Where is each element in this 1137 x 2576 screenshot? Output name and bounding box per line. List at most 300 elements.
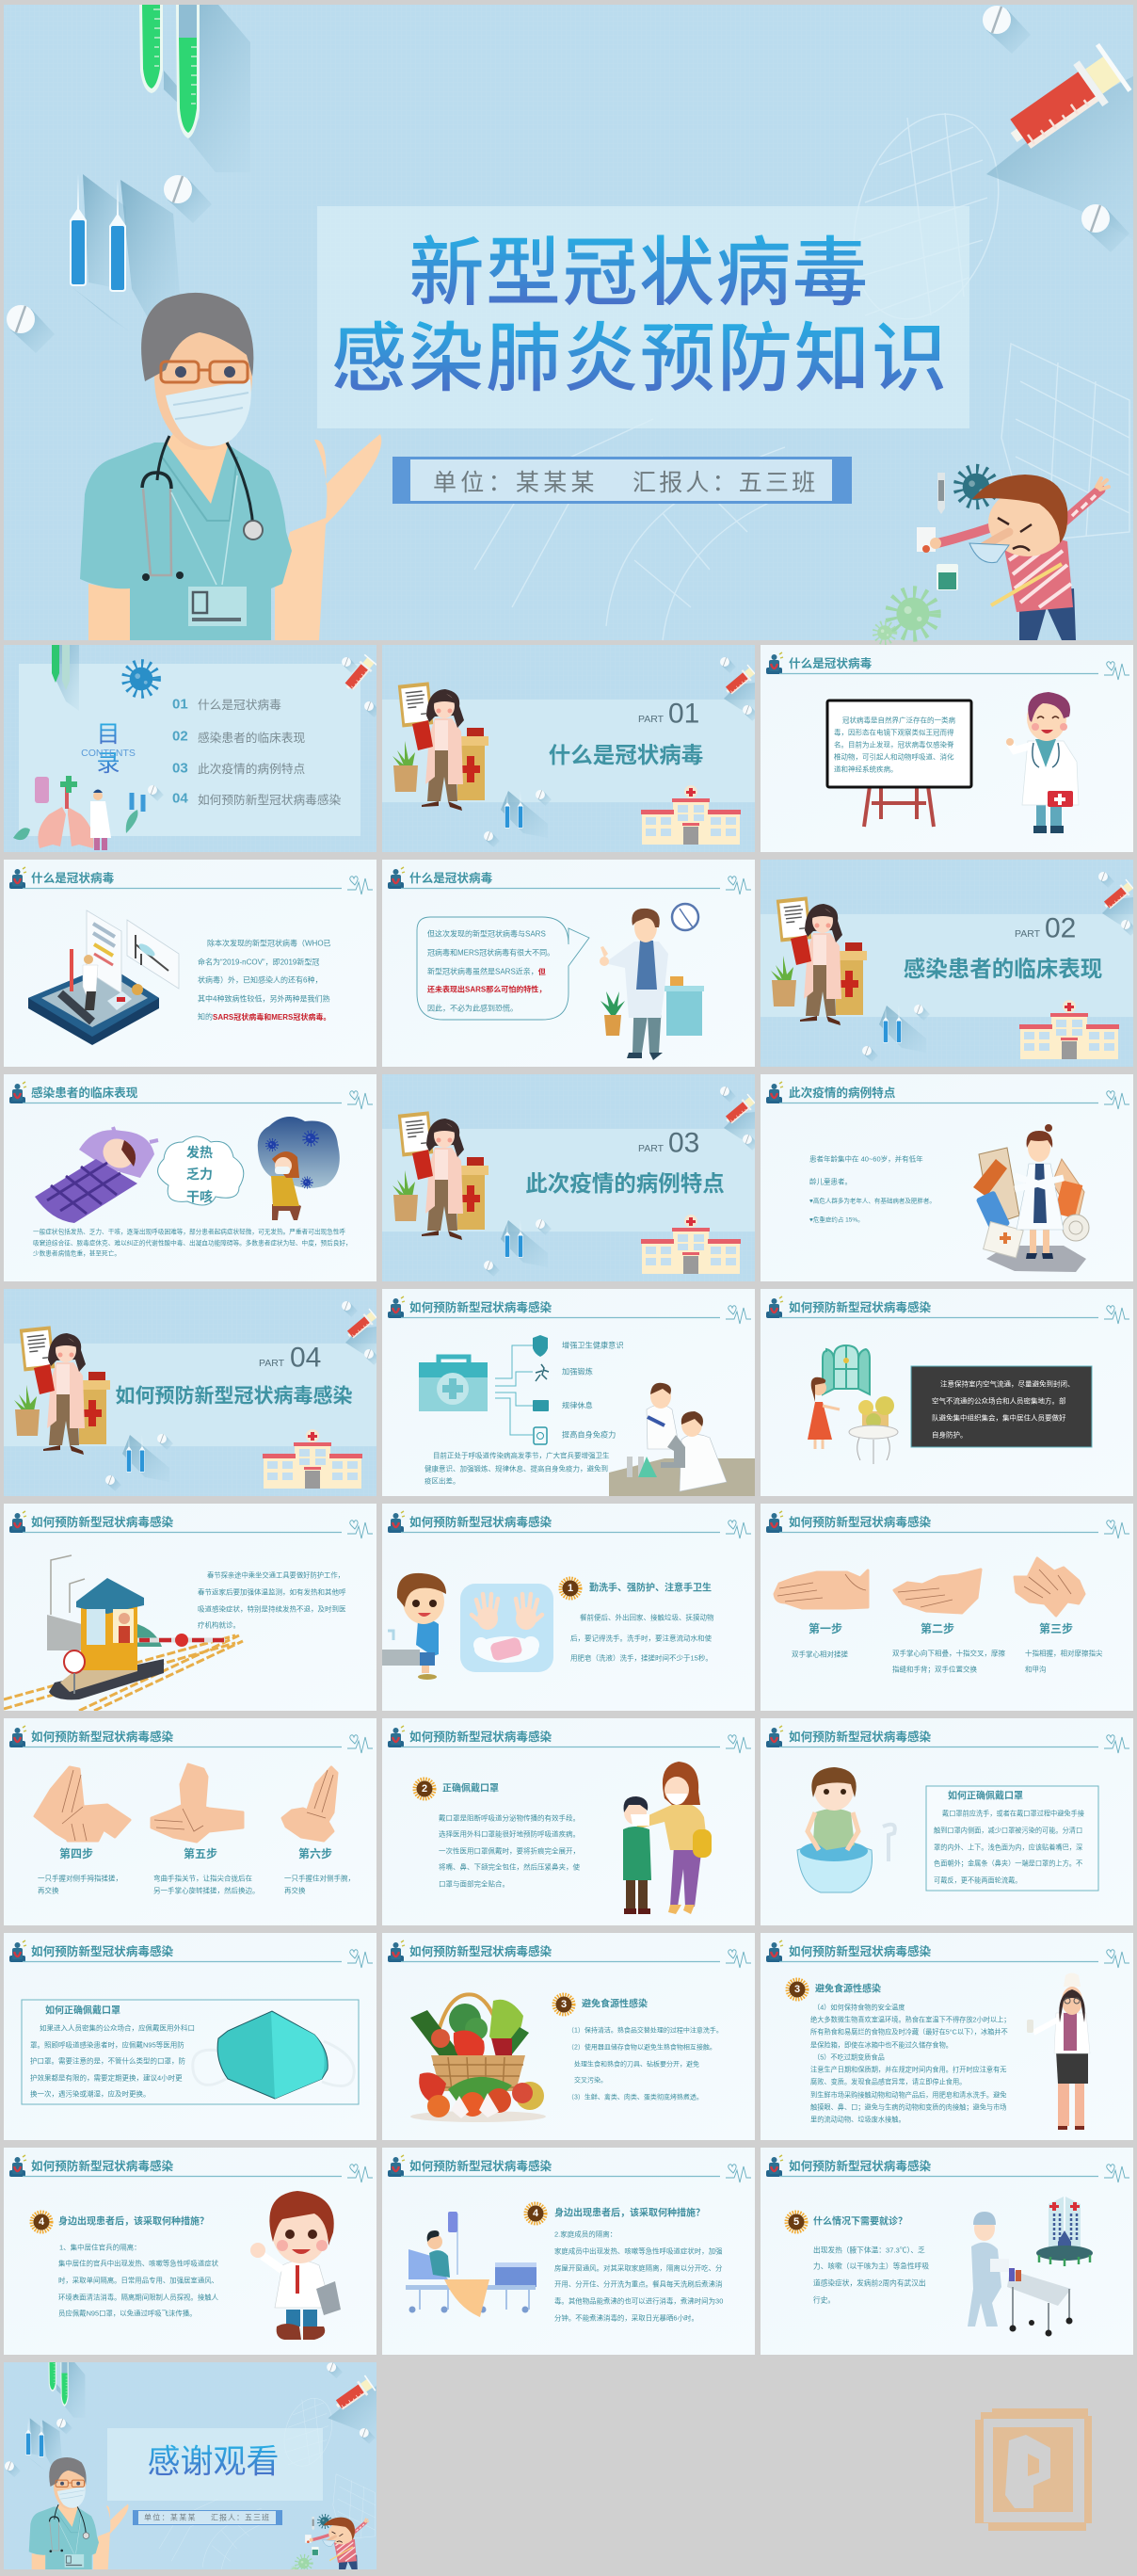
paragraph: 1、集中居住官兵的隔离： — [59, 2243, 141, 2252]
slide: if someone is sick 1 — [4, 2148, 376, 2355]
board with text: 冠状病毒是自然界广泛存在的一类病 — [842, 716, 955, 725]
mask tips box: 戴口罩前应洗手，或者在戴口罩过程中避免手接 — [942, 1810, 1084, 1817]
desk — [665, 976, 704, 1036]
paragraph: 春节返家后要加强体温监测，如有发热和其他呼 — [198, 1587, 346, 1597]
icon: clock — [672, 904, 698, 930]
text block: 患者年龄集中在 40~60岁，并有低年 — [809, 1154, 923, 1164]
step 2: 指缝和手背；双手位置交换 — [892, 1665, 977, 1674]
step 4: 第四步 — [59, 1846, 93, 1860]
heading: 什么是冠状病毒 — [789, 656, 873, 670]
section art — [4, 1289, 380, 1496]
part number: PART — [638, 1143, 665, 1154]
slide background — [4, 1933, 376, 2140]
badge 1: 1 — [568, 1583, 573, 1594]
section title: 如何预防新型冠状病毒感染 — [115, 1384, 352, 1407]
badge 3: 3 — [794, 1984, 800, 1995]
heading: 如何预防新型冠状病毒感染 — [31, 2159, 174, 2173]
heading: 如何预防新型冠状病毒感染 — [409, 1300, 552, 1314]
step 6: 第六步 — [298, 1846, 332, 1860]
section title: 感染患者的临床表现 — [904, 956, 1102, 981]
contents list: 03 — [172, 761, 188, 776]
step 1: 双手掌心相对揉搓 — [792, 1650, 848, 1659]
mask tips box: 换一次，遇污染或潮湿，应及时更换。 — [30, 2088, 151, 2098]
branch labels: 加强锻炼 — [562, 1367, 593, 1377]
paragraph: 力、咳嗽（以干咳为主）等急性呼吸 — [813, 2262, 929, 2271]
illustration: cartoon doctor — [250, 2191, 341, 2340]
paragraph: 一般症状包括发热、乏力、干咳，逐渐出现呼吸困难等，部分患者起病症状轻微，可无发热。严重者可出现急性呼 — [33, 1228, 345, 1235]
contents list: 感染患者的临床表现 — [198, 731, 305, 745]
step 5: 第五步 — [184, 1846, 217, 1860]
part number: 03 — [668, 1128, 699, 1158]
slide background — [382, 1289, 755, 1496]
step 5: 另一手掌心旋转揉搓，然后换边。 — [153, 1885, 260, 1894]
paragraph: 时，采取单间隔离。日常用品专用、加强居室通风、 — [58, 2277, 218, 2284]
speech bubble with text: 因此，不必为此感到恐慌。 — [427, 1004, 518, 1013]
badge 4: 4 — [39, 2216, 45, 2228]
contents list: 04 — [172, 791, 188, 806]
paragraph: 除本次发现的新型冠状病毒（WHO已 — [207, 938, 331, 947]
step 2: 双手掌心向下相叠，十指交叉，摩擦 — [892, 1648, 1005, 1657]
icon: runner — [536, 1364, 549, 1381]
paragraph — [198, 1570, 346, 1629]
step 6: 一只手握住对侧手腕， — [284, 1874, 355, 1883]
header strip — [9, 1082, 373, 1109]
illustration: window — [823, 1345, 870, 1394]
paragraph: 知的SARS冠状病毒和MERS冠状病毒。 — [198, 1011, 330, 1021]
title panel — [317, 206, 969, 428]
paragraph — [33, 1228, 352, 1258]
thought cloud with symptoms — [158, 1136, 244, 1205]
paragraph: 疗机构就诊。 — [198, 1619, 240, 1629]
header strip — [766, 1726, 1129, 1753]
heading: 如何预防新型冠状病毒感染 — [789, 1300, 932, 1314]
mask tips box: 护效果都是有限的，需要定期更换，建议4小时更 — [30, 2073, 183, 2083]
slide: wearing a mask 3 — [4, 1933, 376, 2140]
section art — [382, 1074, 759, 1281]
speech bubble with text — [417, 917, 589, 1020]
paragraph — [810, 2004, 1010, 2124]
section art — [382, 645, 759, 852]
slide background — [761, 1074, 1133, 1281]
list: （3）生鲜、禽类、肉类、蛋类彻底烤熟煮透。 — [568, 2092, 703, 2101]
badge heading: 什么情况下需要就诊？ — [813, 2214, 907, 2228]
contents list: 什么是冠状病毒 — [198, 699, 281, 712]
paragraph: 腐败、变质。发现食品感官异常，请立即停止食用。 — [810, 2077, 966, 2086]
slide: part 04 — [4, 1289, 380, 1496]
paragraph: 一次性医用口罩佩戴时，要将折痕完全展开， — [439, 1845, 580, 1855]
illustration: doctor with supplies — [973, 1124, 1089, 1272]
slide background — [382, 1933, 755, 2140]
reporter bar: 单位：某某某 — [144, 2512, 197, 2521]
dark text panel — [911, 1366, 1092, 1447]
paragraph: 其中4种致病性较低，另外两种是我们熟 — [198, 994, 329, 1004]
speech bubble with text: 还未表现出SARS那么可怕的特性， — [427, 985, 546, 994]
mask tips box: 如何正确佩戴口罩 — [45, 2004, 120, 2017]
header strip — [9, 2155, 373, 2182]
branch labels: 提高自身免疫力 — [562, 1429, 616, 1439]
paragraph: 戴口罩是阻断呼吸道分泌物传播的有效手段。 — [439, 1813, 580, 1823]
dark text panel: 队避免集中组织集会，集中居住人员要做好 — [932, 1412, 1066, 1422]
slide: prevention overview — [382, 1289, 755, 1496]
branch labels: 增强卫生健康意识 — [562, 1341, 624, 1350]
header strip — [9, 1940, 373, 1968]
part number — [1015, 917, 1075, 938]
slide: contents — [4, 645, 380, 852]
badge heading: 勤洗手、强防护、注意手卫生 — [589, 1582, 712, 1593]
board with text — [827, 700, 971, 787]
illustration: isometric phone — [28, 910, 179, 1045]
mask tips box: 如果进入人员密集的公众场合，应佩戴医用外科口 — [40, 2022, 195, 2032]
section title: 什么是冠状病毒 — [549, 743, 703, 767]
text block: ♥高危人群多为老年人、有基础病者及肥胖者。 — [809, 1196, 936, 1205]
badge heading: 正确佩戴口罩 — [442, 1781, 499, 1795]
dark text panel: 自身防护。 — [932, 1429, 968, 1439]
mask tips box: 触到口罩内侧面，减少口罩被污染的可能。分清口 — [934, 1827, 1082, 1834]
paragraph: 集中居住的官兵中出现发热、咳嗽等急性呼吸道症状 — [58, 2260, 219, 2267]
header strip — [9, 1511, 373, 1538]
heading: 如何预防新型冠状病毒感染 — [31, 1730, 174, 1744]
slide background — [761, 1504, 1133, 1711]
illustration: doctor with kit — [1006, 692, 1079, 833]
paragraph — [570, 1612, 714, 1663]
list — [568, 2026, 723, 2101]
step 5 — [152, 1764, 260, 1894]
thanks title: 感谢观看 — [147, 2444, 280, 2480]
slide background — [382, 860, 755, 1067]
slide background — [4, 860, 376, 1067]
paragraph: 道感染症状，发病前2周内有武汉出 — [813, 2278, 926, 2288]
text block: ♥危重症约占 15%。 — [809, 1215, 864, 1224]
mask tips box: 护口罩。需要注意的是，不管什么类型的口罩，防 — [30, 2056, 185, 2066]
heading: 如何预防新型冠状病毒感染 — [409, 2159, 552, 2173]
hands 3 — [1015, 1558, 1084, 1616]
illustration: hospital building — [1036, 2197, 1093, 2266]
slide background — [4, 1504, 376, 1711]
part number — [259, 1343, 321, 1373]
paragraph: 员应佩戴N95口罩，以免通过呼吸飞沫传播。 — [58, 2309, 197, 2318]
slide: wearing a mask 2 — [761, 1718, 1133, 1925]
illustration: hospital bed — [406, 2212, 536, 2317]
slide: what is coronavirus 2 — [4, 860, 376, 1067]
paragraph: 口罩与面部完全贴合。 — [439, 1879, 509, 1889]
header strip — [388, 867, 751, 894]
cover illustration: doctor, sick boy, medical items — [4, 5, 1133, 642]
mask tips box: 罩的内外、上下。浅色面为内，应该贴着嘴巴，深 — [934, 1843, 1082, 1851]
paragraph: 开用、分开住、分开洗为重点。餐具每天洗刷后煮沸消 — [554, 2278, 723, 2288]
contents background — [4, 645, 380, 852]
heading: 如何预防新型冠状病毒感染 — [409, 1944, 552, 1958]
step 6: 再交换 — [284, 1885, 306, 1894]
thought cloud with symptoms: 干咳 — [186, 1189, 213, 1204]
mask tips box: 色面朝外；金属条（鼻夹）一端是口罩的上方。不 — [934, 1859, 1082, 1868]
easel — [864, 786, 934, 827]
heading: 什么是冠状病毒 — [409, 871, 493, 885]
contents heading: 目 — [96, 721, 120, 748]
title line 1: 新型冠状病毒 — [408, 232, 870, 314]
paragraph: 所有熟食和易腐烂的食物应及时冷藏（最好在5°C以下），冰箱并不 — [810, 2028, 1008, 2036]
icon: bed — [533, 1400, 549, 1411]
badge 5: 5 — [793, 2216, 799, 2228]
heading: 感染患者的临床表现 — [31, 1086, 138, 1100]
slide: part 02 — [761, 860, 1137, 1067]
slide: case features — [761, 1074, 1133, 1281]
illustration: girl in red dress — [808, 1377, 840, 1449]
board with text: 道和神经系统疾病。 — [834, 765, 898, 774]
list: 交叉污染。 — [574, 2075, 607, 2085]
slide: part 01 — [382, 645, 759, 852]
header strip — [766, 1082, 1129, 1109]
speech bubble with text: 但这次发现的新型冠状病毒与SARS — [427, 928, 546, 938]
soap and hands bubble — [460, 1584, 553, 1672]
thought cloud with symptoms: 发热 — [186, 1145, 213, 1160]
step 3: 十指相握，相对摩擦指尖 — [1025, 1648, 1103, 1657]
list: （2）使用器皿储存食物以避免生熟食物相互接触。 — [568, 2043, 716, 2051]
section title: 此次疫情的病例特点 — [525, 1171, 725, 1196]
badge 3 — [553, 1994, 574, 2015]
panel: cover slide — [4, 5, 1133, 642]
badge 2 — [414, 1779, 435, 1798]
paragraph — [58, 2243, 219, 2318]
watermark stamp — [975, 2408, 1092, 2531]
paragraph — [198, 938, 331, 1021]
slide: ventilation — [761, 1289, 1133, 1496]
list: （1）保持清洁。熟食品交替处理的过程中注意洗手。 — [568, 2026, 723, 2034]
paragraph: 用肥皂（洗液）洗手，揉搓时间不少于15秒。 — [570, 1653, 713, 1663]
heading: 什么是冠状病毒 — [31, 871, 115, 885]
contents list: 01 — [172, 697, 188, 712]
heading: 如何预防新型冠状病毒感染 — [31, 1515, 174, 1529]
slide: food safety 2 — [761, 1933, 1133, 2140]
illustration: toll booth — [4, 1555, 243, 1711]
slide: part 03 — [382, 1074, 759, 1281]
step 3: 第三步 — [1039, 1621, 1073, 1635]
paragraph: 2.家庭成员的隔离： — [554, 2230, 617, 2239]
paragraph: 吸窘迫综合征、脓毒症休克、难以纠正的代谢性酸中毒、出凝血功能障碍等。多数患者症状为轻、中度，预后良好， — [33, 1239, 352, 1247]
header strip — [766, 1940, 1129, 1968]
thought cloud with symptoms: 乏力 — [186, 1167, 213, 1182]
paragraph: 绝大多数微生物喜欢室温环境。熟食在室温下不得存放2小时以上； — [810, 2015, 1010, 2024]
heading: 如何预防新型冠状病毒感染 — [31, 1944, 174, 1958]
contents list: 此次疫情的病例特点 — [198, 762, 305, 776]
paragraph: 出现发热（腋下体温：37.3℃）、乏 — [813, 2245, 925, 2254]
badge 3 — [787, 1979, 808, 2000]
slide: travel prevention — [4, 1504, 376, 1711]
step 1 — [775, 1570, 868, 1659]
paragraph: 触摸眼、鼻、口；避免与生病的动物和变质的肉接触；避免与市场 — [810, 2103, 1006, 2111]
step 4: 再交换 — [38, 1885, 59, 1894]
badge 5 — [787, 2213, 806, 2231]
hands 6 — [282, 1767, 337, 1841]
paragraph: 里的流动动物、垃圾废水接触。 — [810, 2115, 905, 2124]
slide: what is coronavirus 1 — [761, 645, 1133, 852]
paragraph: 餐前便后、外出回家、接触垃圾、抚摸动物 — [580, 1612, 714, 1621]
step 4 — [35, 1767, 130, 1894]
part number: 01 — [668, 699, 699, 729]
reporter bar: 单位：某某某 — [433, 470, 599, 496]
plant — [601, 991, 625, 1036]
speech bubble with text: 新型冠状病毒虽然是SARS近亲，但 — [427, 966, 546, 975]
reporter bar — [133, 2510, 282, 2525]
heading: 如何预防新型冠状病毒感染 — [409, 1730, 552, 1744]
slide background — [4, 1718, 376, 1925]
paragraph: 到生鲜市场采购接触动物和动物产品后，用肥皂和清水洗手。避免 — [810, 2090, 1006, 2100]
header strip — [388, 1940, 751, 1968]
hands 5 — [152, 1764, 243, 1842]
slide: food safety 1 — [382, 1933, 755, 2140]
hands 4 — [35, 1767, 130, 1841]
reporter bar: 汇报人：五三班 — [633, 470, 818, 496]
illustration: patient in bed — [35, 1127, 158, 1223]
dark text panel: 注意保持室内空气流通，尽量避免到封闭、 — [940, 1378, 1075, 1388]
speech bubble with text: 冠病毒和MERS冠状病毒有很大不同。 — [427, 947, 554, 957]
list: 处理生食和熟食的刀具、砧板要分开，避免 — [574, 2060, 699, 2068]
header strip — [388, 1511, 751, 1538]
header strip — [766, 652, 1129, 680]
step 1: 第一步 — [809, 1621, 842, 1635]
slide: hand washing — [382, 1504, 755, 1711]
badge 4 — [32, 2213, 51, 2231]
contents list — [172, 697, 342, 807]
header strip — [9, 1726, 373, 1753]
slide: wearing a mask 1 — [382, 1718, 755, 1925]
badge heading: 避免食源性感染 — [815, 1983, 881, 1994]
cover illustration, small — [4, 2362, 376, 2572]
icon: first aid kit — [419, 1357, 488, 1411]
illustration: N95 mask — [193, 2011, 354, 2099]
header strip — [766, 1511, 1129, 1538]
branch lines — [495, 1345, 533, 1435]
slide: clinical signs — [4, 1074, 376, 1281]
paragraph: 状病毒）外，已知感染人的还有6种， — [198, 975, 322, 985]
heading: 如何预防新型冠状病毒感染 — [789, 1730, 932, 1744]
slide: steps 1-3 — [761, 1504, 1133, 1711]
badge 2: 2 — [422, 1783, 427, 1795]
paragraph — [554, 2230, 723, 2322]
board with text: 椎动物，可引起人和动物呼吸道、消化 — [834, 751, 954, 761]
part number: 02 — [1045, 913, 1076, 943]
text block — [809, 1154, 936, 1224]
board with text: 名。目前为止发现，冠状病毒仅感染脊 — [834, 740, 954, 749]
paragraph: 行史。 — [813, 2295, 835, 2305]
slide: thanks — [4, 2362, 376, 2572]
part number — [638, 702, 698, 723]
badge 1 — [561, 1578, 580, 1599]
text block: 龄儿童患者。 — [809, 1177, 852, 1186]
mask tips box: 罩。照顾呼吸道感染患者时，应佩戴N95等医用防 — [30, 2039, 184, 2049]
slide: when to see a doctor — [761, 2148, 1133, 2355]
step 2: 第二步 — [921, 1621, 954, 1635]
mask tips box: 如何正确佩戴口罩 — [948, 1789, 1023, 1802]
paragraph: 是保险箱，即使在冰箱中也不能过久储存食物。 — [810, 2041, 953, 2049]
part number: PART — [638, 714, 665, 725]
paragraph: 少数患者病情危重，甚至死亡。 — [33, 1248, 120, 1258]
contents heading — [81, 723, 136, 774]
paragraph: 分钟。不能煮沸消毒的，采取日光暴晒6小时。 — [554, 2312, 698, 2322]
badge 4 — [525, 2203, 546, 2224]
title line 2: 感染肺炎预防知识 — [331, 316, 949, 401]
paragraph — [424, 1450, 610, 1486]
badge heading: 避免食源性感染 — [582, 1998, 648, 2009]
slide background — [4, 2148, 376, 2355]
step 6 — [282, 1767, 355, 1894]
slide background — [761, 645, 1133, 852]
slide: if someone is sick 2 — [382, 2148, 755, 2355]
slide background — [761, 2148, 1133, 2355]
paragraph: 目前正处于呼吸道传染病高发季节，广大官兵要增强卫生 — [433, 1450, 610, 1459]
heading: 如何预防新型冠状病毒感染 — [409, 1515, 552, 1529]
reporter bar — [392, 457, 852, 504]
contents list: 如何预防新型冠状病毒感染 — [198, 793, 342, 807]
branch labels: 规律休息 — [562, 1401, 593, 1410]
slide background — [4, 1074, 376, 1281]
paragraph: 环境表面清洁消毒。隔离期间限制人员探视。接触人 — [58, 2294, 219, 2301]
header strip — [766, 2155, 1129, 2182]
step 4: 一只手握对侧手拇指揉搓， — [38, 1874, 122, 1883]
badge 4: 4 — [533, 2208, 539, 2219]
heading: 此次疫情的病例特点 — [789, 1086, 896, 1100]
paragraph: 选择医用外科口罩能很好地预防呼吸道疾病。 — [439, 1828, 580, 1838]
hands 1 — [775, 1570, 868, 1608]
dark text panel: 空气不流通的公众场合和人员密集地方。部 — [932, 1395, 1066, 1405]
paragraph — [439, 1813, 580, 1889]
header strip — [388, 1296, 751, 1324]
illustration: lungs and doctor — [13, 776, 137, 850]
illustration: coughing girl — [258, 1117, 340, 1220]
header strip — [766, 1296, 1129, 1324]
illustration: boy washing hands — [382, 1573, 446, 1680]
part number: PART — [259, 1358, 285, 1369]
step 2 — [892, 1570, 1005, 1674]
hands 2 — [894, 1570, 981, 1613]
illustration: flower table — [849, 1396, 898, 1464]
paragraph: （5）不吃过期变质食品 — [813, 2053, 885, 2062]
slide: steps 4-6 — [4, 1718, 376, 1925]
heading: 如何预防新型冠状病毒感染 — [789, 1515, 932, 1529]
reporter bar: 汇报人：五三班 — [211, 2512, 270, 2521]
slide background — [761, 1718, 1133, 1925]
heading: 如何预防新型冠状病毒感染 — [789, 1944, 932, 1958]
slide background — [382, 1504, 755, 1711]
paragraph: 将嘴、鼻、下颌完全包住，然后压紧鼻夹，使 — [439, 1862, 580, 1872]
step 5: 弯曲手指关节，让指尖合拢后在 — [153, 1874, 252, 1883]
icon: virus — [126, 664, 156, 694]
illustration: nurse with cart — [968, 2212, 1073, 2337]
contents heading: 录 — [96, 750, 120, 777]
board with text: 毒，因形态在电镜下观察类似王冠而得 — [834, 727, 954, 736]
paragraph: 命名为“2019-nCOV”，即2019新型冠 — [198, 957, 319, 966]
slide background — [761, 1289, 1133, 1496]
thanks panel — [107, 2428, 323, 2501]
badge heading: 身边出现患者后，该采取何种措施？ — [554, 2207, 705, 2218]
paragraph: 健康意识、加强锻炼、规律休息、提高自身免疫力，避免到 — [424, 1463, 608, 1473]
paragraph: 毒。其他物品能煮沸的也可以进行消毒，煮沸时间为30 — [554, 2295, 723, 2305]
icon: shield — [533, 1335, 548, 1357]
contents list: 02 — [172, 729, 188, 744]
header strip — [388, 2155, 751, 2182]
illustration: doctor — [600, 909, 668, 1060]
paragraph: 注意生产日期和保质期，并在规定时间内食用。打开时应注意有无 — [810, 2066, 1006, 2073]
illustration: nurse with bottle — [1027, 1973, 1090, 2130]
slide: what is coronavirus 3 — [382, 860, 755, 1067]
paragraph: 后，要记得洗手。洗手时，要注意流动水和使 — [570, 1633, 712, 1642]
mask tips box: 可戴反，更不能两面轮流戴。 — [934, 1876, 1021, 1885]
header strip — [388, 1726, 751, 1753]
paragraph: （4）如何保持食物的安全温度 — [813, 2004, 905, 2011]
step 3 — [1015, 1558, 1103, 1674]
paragraph: 房屋开窗通风。对其采取家庭隔离，隔离以分开吃、分 — [554, 2263, 723, 2273]
heading: 如何预防新型冠状病毒感染 — [789, 2159, 932, 2173]
part number — [638, 1128, 699, 1158]
